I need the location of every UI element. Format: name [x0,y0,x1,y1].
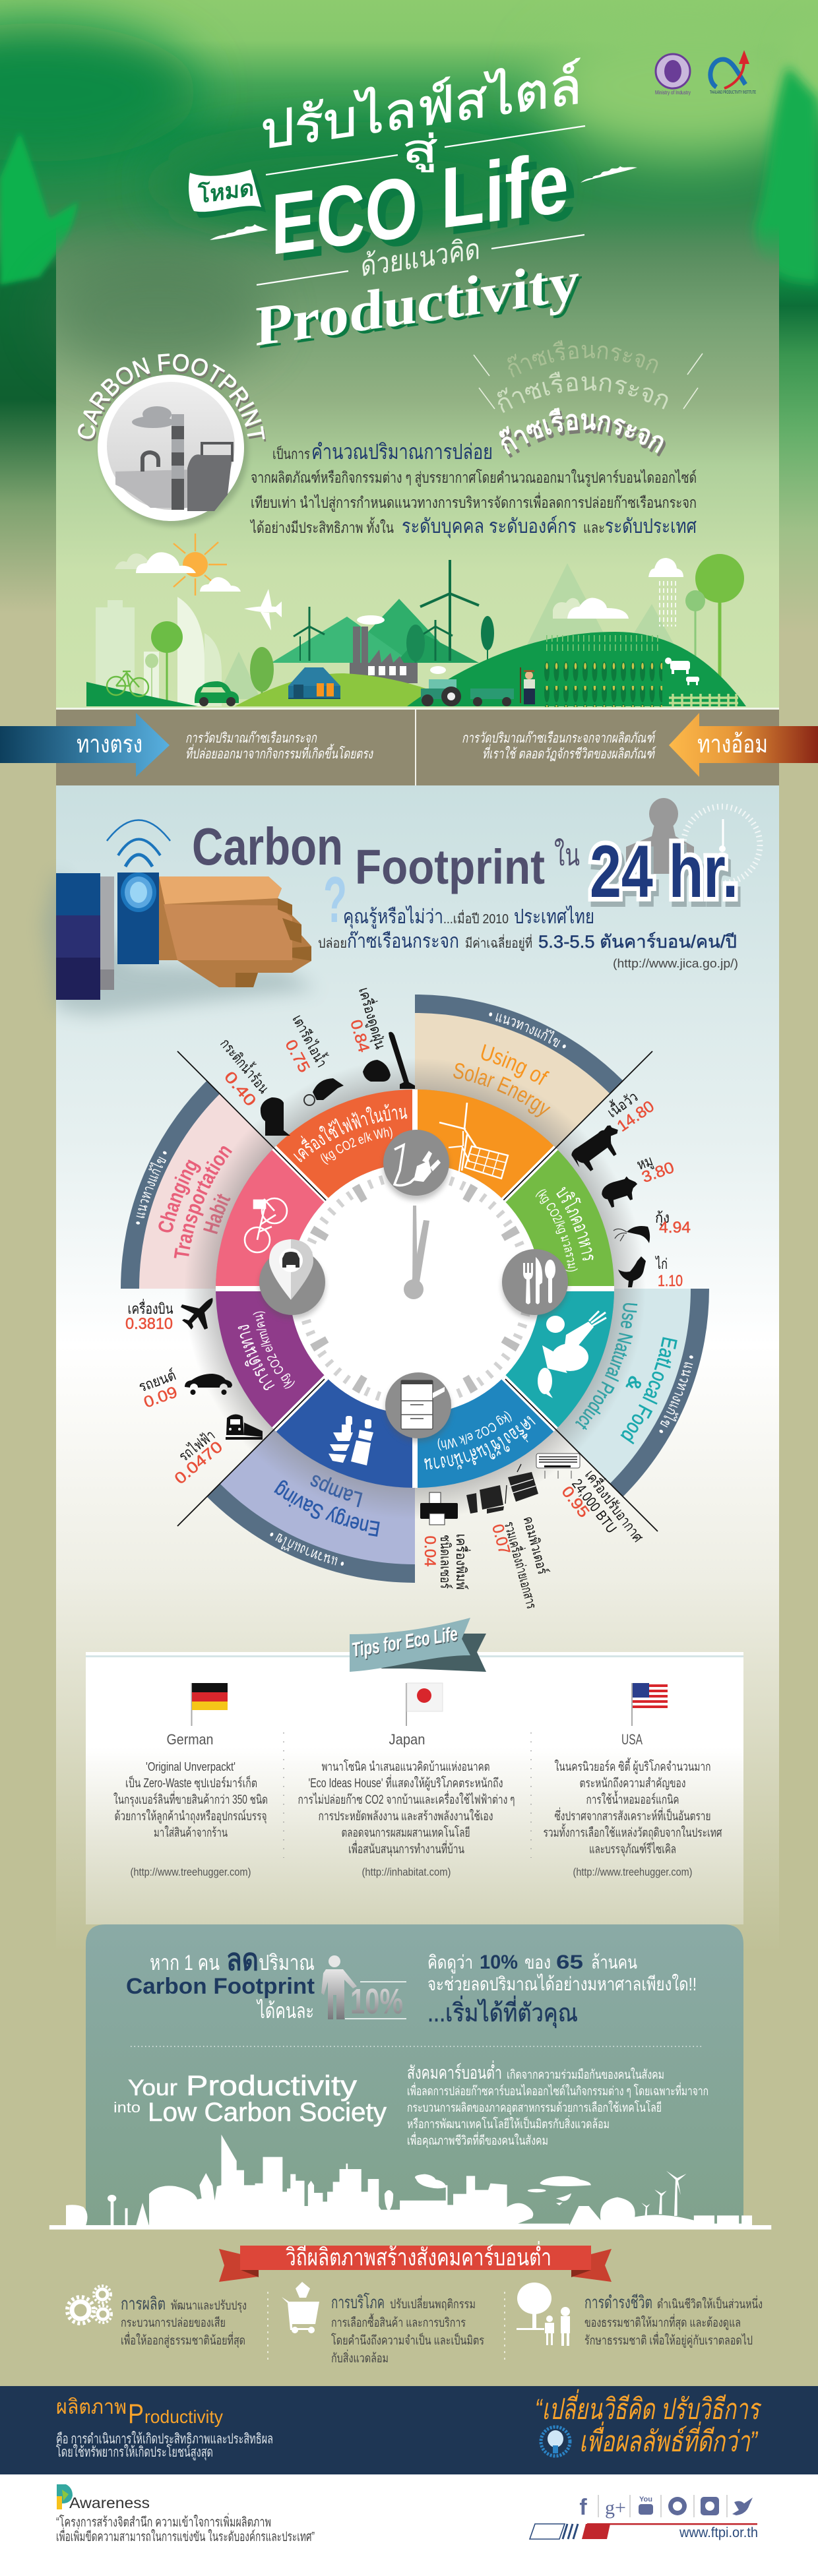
column: consumption: การบริโภค [331,2292,385,2312]
text block: project statement: เพื่อเพิ่มขีดความสามารถในการแข่งขัน ในระดับองค์กรและประเทศ” [56,2527,315,2544]
badge: filing cabinet [385,1372,451,1442]
text: indirect description: การวัดปริมาณก๊าซเรือนกระจกจากผลิตภัณฑ์ [462,730,656,746]
panel: carbon footprint intro [46,50,779,708]
title line: ปรับไลฟ์สไตล์: ปรับไลฟ์สไตล์ [261,56,582,160]
text block: think about 65 million: คิดดูว่า [427,1952,473,1974]
panel: ten percent and low carbon society [49,1924,771,2230]
icon: thermos [261,1097,290,1136]
column: Japan: 'Eco Ideas House' ที่แสดงให้ผู้บริโภคตระหนักถึง [309,1774,503,1791]
arrow: direct [0,713,170,777]
column: production: พัฒนาและปรับปรุง [171,2299,247,2314]
column: Germany: 'Original Unverpackt' [146,1760,236,1773]
items: electric appliances: กระติกน้ำร้อน [217,1034,274,1097]
sector: solar energy solution: Using of [482,1044,550,1086]
arrow: indirect: ทางอ้อม [697,731,768,758]
column: living [517,2283,763,2348]
items: office: ชนิดเลเซอร์ [437,1535,453,1589]
sector: local food solution: & [625,1376,641,1389]
column: production: เพื่อให้ออกสู่ธรรมชาติน้อยที่สุด [121,2331,245,2348]
logo: Ministry of Industry seal [655,54,691,96]
heading: Carbon Footprint in 24 hr [192,817,741,918]
items: food: 4.94 [659,1219,691,1237]
icon: person with 10 percent [321,1955,406,2021]
column: Germany: เป็น Zero-Waste ซุปเปอร์มาร์เก็ต [125,1775,257,1791]
sector: local food solution: Use Natural Product [575,1303,637,1430]
text block: think about 65 million: 65 [556,1951,583,1973]
column: Germany: ในกรุงเบอร์ลินที่ขายสินค้ากว่า 350 ชนิด [113,1791,268,1808]
column: Japan: การไม่ปล่อยก๊าซ CO2 จากบ้านและเครื่องใช้ไฟฟ้าต่าง ๆ [298,1791,515,1807]
panel: carbon footprint in 24 hours [0,785,818,2576]
sector: food consumption: (kg CO2/kg มวลรวม) [536,1189,578,1272]
heading: your productivity into low carbon society: Productivity [186,2070,358,2102]
column: Japan: เพื่อสนับสนุนการทำงานที่บ้าน [348,1840,464,1857]
text block: productivity definition: คือ การดำเนินการให้เกิดประสิทธิภาพและประสิทธิผล [56,2431,273,2447]
icon: wheat left [210,224,268,240]
items: office: เครื่องปรับอากาศ [582,1465,648,1545]
clock hands [404,1206,429,1299]
sector: travel: การเดินทาง [232,1322,279,1395]
title line: ECO Life: Life [449,140,577,253]
panel: productivity ways for low carbon society [67,2241,763,2366]
items: travel: 0.0470 [172,1438,226,1488]
icon: wifi arcs [107,820,170,867]
far mountains [216,563,686,699]
text block: reduce 10 percent: หาก 1 คน [150,1951,220,1975]
icon: plane [181,1298,212,1330]
text block: definition paragraph: คำนวณปริมาณการปล่อย [311,440,493,464]
column: USA [544,1683,722,1878]
icon: car [195,681,239,706]
text block: definition paragraph: ได้อย่างมีประสิทธิภาพ ทั้งใน [249,517,394,536]
logo: Thailand Productivity Institute [710,50,756,95]
text block: did you know: คุณรู้หรือไม่ว่า [343,905,443,929]
column: USA: ในนครนิวยอร์ค ซิตี้ ผู้บริโภคจำนวนมาก [554,1758,711,1774]
illustration: hand thumbs down with wrist band [56,873,311,1000]
icon: printer [420,1492,458,1525]
text block: low carbon society [407,2060,708,2149]
column: living: ดำเนินชีวิตให้เป็นส่วนหนึ่ง [657,2295,763,2312]
items: office: 24,000 BTU [569,1476,620,1536]
logo: Ministry of Industry seal: Ministry of Industry [655,90,691,96]
sector: electric appliances [274,1089,415,1200]
title line: ECO Life: ECO [279,164,425,280]
text block: project statement [56,2513,315,2544]
column: living: การดำรงชีวิต [584,2292,652,2312]
text block: definition paragraph: เป็นการ [272,445,310,462]
panel: productivity definition navy band [0,2386,818,2474]
sector: local food solution: EatLocal Food [620,1337,677,1444]
text block: low carbon society: เกิดจากความร่วมมือกันของคนในสังคม [507,2068,664,2082]
logo: Thailand Productivity Institute: THAILAND PRODUCTIVITY INSTITUTE [710,90,756,95]
title line: ECO Life: Life [441,134,569,247]
column: consumption: โดยคำนึงถึงความจำเป็น และเป็นมิตร [331,2332,484,2348]
sector: office equipment: เครื่องใช้ในสำนักงาน [424,1411,540,1476]
icon: fence [669,694,738,706]
icon: bicycle with basket [245,1198,287,1252]
column: USA: และบรรจุภัณฑ์รีไซเคิล [589,1842,676,1857]
items: travel: เครื่องบิน [128,1299,173,1317]
text: direct description [185,731,373,762]
text: direct description: ที่ปล่อยออกมาจากกิจกรรมที่เกิดขึ้นโดยตรง [185,743,373,762]
badge: plug [383,1130,449,1200]
sector: changing transportation solution: • แนวทางแก้ไข • [136,1151,167,1225]
items: office: 0.07 [488,1522,513,1556]
heading: productivity: ผลิตภาพ [56,2395,127,2418]
items: food: หมู [635,1152,655,1174]
text block: low carbon society: หรือการพัฒนาเทคโนโลยีให้เป็นมิตรกับสิ่งแวดล้อม [407,2115,610,2131]
title line: Productivity: Productivity [255,249,579,358]
icon: car silhouette [185,1374,232,1395]
column: Japan [298,1683,515,1878]
text block: reduce 10 percent: ปริมาณ [259,1951,315,1975]
panel: footer [0,2474,818,2576]
sector: changing transportation solution [121,1081,274,1289]
sector: food consumption [503,1148,614,1289]
text block: low carbon society: เพื่อคุณภาพชีวิตที่ดีของคนในสังคม [407,2131,548,2149]
text block: curved greenhouse gas words: ก๊าซเรือนกระจก [497,371,668,413]
text block: think about 65 million [427,1951,697,2028]
title line: Productivity: Productivity [259,252,582,361]
title [189,56,637,361]
items: office: เครื่องพิมพ์ [453,1534,471,1589]
icon: shrimp [614,1226,650,1243]
icon: wind and solar [439,1103,508,1179]
title line: ECO Life: ECO [271,158,418,273]
ring dividers and spokes [177,1051,658,1531]
sector: energy saving lamps solution: Energy Saving [274,1480,380,1537]
text block: think about 65 million: ล้านคน [591,1952,637,1973]
items: electric appliances: เครื่องดูดฝุ่น [355,985,391,1051]
text block: curved greenhouse gas words: ก๊าซเรือนกระจก [501,410,666,458]
text block: low carbon society: สังคมคาร์บอนต่ำ [407,2060,502,2083]
heading: Carbon Footprint in 24 hr: ใน [554,838,580,872]
sector: local food solution: • แนวทางแก้ไข • [659,1355,693,1433]
sector: local food inner [503,1289,614,1430]
icon: pig [599,1174,642,1210]
icon: Japan flag [406,1683,443,1726]
banner: tips ribbon: Tips for Eco Life [350,1623,459,1661]
column: Germany [113,1683,268,1878]
text: direct description: การวัดปริมาณก๊าซเรือนกระจก [185,731,317,746]
column: USA: USA [621,1731,643,1748]
title line: สู่: สู่ [402,128,438,172]
text block: reduce 10 percent: ลด [226,1942,259,1977]
text block: did you know: ปล่อย [318,936,347,951]
text block: did you know: ...เมื่อปี 2010 [443,909,509,927]
text block: reduce 10 percent: ได้คนละ [256,1999,314,2023]
icon: vegetables [538,1311,606,1398]
heading: Carbon Footprint in 24 hr: Carbon [192,817,343,876]
items: food: 1.10 [658,1272,683,1290]
text block: project statement: “โครงการสร้างจิตสำนึก ความเข้าใจการเพิ่มผลิตภาพ [56,2513,271,2530]
text block: definition paragraph: เทียบเท่า นำไปสู่การกำหนดแนวทางการบริหารจัดการเพื่อลดการปล่อยก๊าซเรือนกระจก [251,492,697,512]
icon: wheat right [581,166,637,183]
items: office: 0.95 [558,1483,592,1521]
sector: energy saving lamps solution: • แนวทางแก้ไข • [270,1533,344,1566]
icon: tractor and trailer [421,666,514,706]
items: office: รวมเครื่องถ่ายเอกสาร [501,1519,542,1610]
heading: Carbon Footprint in 24 hr: Footprint [355,840,545,894]
banner: โหมด: โหมด [197,174,254,208]
items: travel: รถไฟฟ้า [175,1426,218,1465]
factory [350,615,418,683]
right clouds and rain [553,558,683,627]
items: travel: 0.09 [141,1383,179,1412]
column: Japan: พานาโซนิค นำเสนอแนวคิดบ้านแห่งอนาคต [322,1759,489,1774]
heading: your productivity into low carbon society: Low Carbon Society [148,2098,387,2127]
badge: car pin [259,1239,325,1319]
arrow: indirect [669,713,818,777]
logo: P Awareness [57,2484,150,2511]
text block: did you know: 5.3-5.5 ตันคาร์บอน/คน/ปี [538,931,737,952]
text block: did you know: (http://www.jica.go.jp/) [613,957,738,970]
clock face [290,1163,540,1414]
quote: เพื่อผลลัพธ์ที่ดีกว่า” [579,2421,759,2458]
items: electric appliances: เตารีดไอน้ำ [289,1011,332,1070]
icon: gears [67,2286,111,2323]
icon: train [226,1414,263,1440]
icon: person and clock [626,798,760,883]
text block: definition paragraph: จากผลิตภัณฑ์หรือกิจกรรมต่าง ๆ สู่บรรยากาศโดยคำนวณออกมาในรูปคาร์บอนไดออกไซด์ [251,469,697,487]
arrow: direct: ทางตรง [77,731,142,758]
heading: your productivity into low carbon society: Your [128,2075,177,2101]
icon: family and tree [517,2283,570,2346]
icon: wind turbines [294,560,479,661]
text block: did you know: ก๊าซเรือนกระจก [347,931,459,952]
icon: question mark: ? [323,863,347,936]
column: consumption: การเลือกซื้อสินค้า และการบริการ [331,2314,466,2330]
hills [86,632,746,707]
heading: Carbon Footprint in 24 hr: 24 hr. [590,830,738,913]
items: office: 0.04 [421,1535,439,1567]
text block: curved greenhouse gas words: ก๊าซเรือนกระจก [499,408,664,454]
badge: carbon footprint factory [98,375,248,526]
sector: electric appliances: (kg CO2 e/k Wh) [321,1126,393,1165]
text block: productivity definition [56,2431,273,2461]
icon: iron [304,1078,344,1105]
items: food: ไก่ [655,1256,668,1272]
illustration: green landscape [86,534,746,707]
sector: energy saving lamps solution [207,1430,415,1583]
logo: P Awareness: Awareness [69,2494,150,2511]
text block: did you know [318,905,738,970]
social media icons: g+ [605,2497,626,2519]
column: Japan: การประหยัดพลังงาน และสร้างพลังงานใช้เอง [318,1809,493,1824]
items: food [569,1087,691,1290]
items: electric appliances: 0.75 [281,1037,313,1076]
illustration: white city skyline [49,2135,771,2230]
sector: transport habit inner [216,1148,327,1289]
social media icons: f [579,2495,587,2520]
items: office [420,1454,648,1610]
column: USA: รวมทั้งการเลือกใช้แหล่งวัตถุดิบจากในประเทศ [544,1824,722,1841]
items: electric appliances [217,985,415,1136]
heading: curved CARBON FOOTPRINT: CARBON FOOTPRINT [78,353,265,439]
items: travel: 0.3810 [125,1315,173,1333]
icon: farmer [520,667,535,704]
icon: USA flag [631,1683,668,1726]
icon: person with 10 percent: 10% [350,1982,403,2021]
sector: solar energy solution: Solar Energy [453,1063,550,1117]
icon: cow [569,1122,629,1175]
sector: changing transportation solution: Changing [158,1159,201,1233]
text block: definition paragraph: ระดับประเทศ [605,516,697,537]
heading: productivity: P [128,2398,144,2429]
items: travel: รถยนต์ [137,1366,178,1395]
icon: cows [665,658,699,685]
text block: did you know: ประเทศไทย [514,905,594,928]
sector: travel: (kg CO2 e/km/คน) [251,1310,297,1392]
sector: electric appliances: เครื่องใช้ไฟฟ้าในบ้าน [293,1104,408,1162]
text block: think about 65 million: จะช่วยลดปริมาณได้อย่างมหาศาลเพียงใด!! [427,1973,697,1994]
social media icons [579,2495,753,2520]
text block: definition paragraph [249,440,697,539]
sector: office equipment [415,1377,556,1488]
text block: curved greenhouse gas words: ก๊าซเรือนกระจก [507,340,658,377]
sector: energy saving lamps solution: Lamps [310,1475,363,1508]
column: production: การผลิต [121,2294,166,2314]
icon: house [288,667,340,699]
text block: reduce 10 percent: Carbon Footprint [126,1974,315,1999]
sector: lamps inner [274,1377,415,1488]
icon: air conditioner [536,1454,580,1479]
column: USA: ซึ่งปราศจากสารสังเคราะห์ที่เป็นอันตราย [554,1807,711,1824]
items: food: เนื้อวัว [603,1087,641,1120]
social media icons: You [639,2496,652,2503]
banner: red ribbon title [219,2241,612,2282]
column: USA: (http://www.treehugger.com) [573,1866,693,1878]
text block: definition paragraph: ระดับบุคคล ระดับองค์กร [402,515,577,539]
text: indirect description: ที่เราใช้ ตลอดวัฏจักรชีวิตของผลิตภัณฑ์ [482,744,656,762]
column: USA: การใช้น้ำหอมออร์แกนิค [586,1791,679,1807]
column: Japan: (http://inhabitat.com) [362,1866,451,1878]
heading: your productivity into low carbon society: into [113,2099,141,2116]
text block: think about 65 million: 10% [480,1951,518,1973]
sector: local food solution [556,1289,709,1496]
logo: FTPI and website [530,2523,758,2540]
logo: FTPI and website: www.ftpi.or.th [679,2525,758,2540]
banner: red ribbon title: วิถีผลิตภาพสร้างสังคมคาร์บอนต่ำ [286,2241,551,2271]
items: electric appliances: 0.84 [346,1018,373,1055]
icon: copier [505,1464,538,1504]
badge: cutlery [502,1249,568,1319]
icon: sun and clouds [115,534,241,596]
panel: tips for eco life [86,1618,743,1924]
icon: vacuum [363,1032,415,1089]
column: consumption: กับสิ่งแวดล้อม [331,2349,389,2366]
column: living: ของธรรมชาติให้มากที่สุด และต้องดูแล [584,2314,741,2331]
column: Germany: มาใส่สินค้าจากร้าน [154,1825,228,1840]
column: Germany: (http://www.treehugger.com) [131,1866,251,1878]
text block: low carbon society: กระบวนการผลิตของภาคอุตสาหกรรมด้วยการเลือกใช้เทคโนโลยี [407,2100,662,2116]
icon: chicken [618,1256,646,1287]
column: living: รักษาธรรมชาติ เพื่อให้อยู่คู่กับเราตลอดไป [584,2331,753,2348]
heading: Carbon Footprint in 24 hr: 24 hr. [592,836,741,918]
sector: solar inner [415,1089,556,1200]
city buildings [96,597,222,706]
banner: tips ribbon: Tips for Eco Life [351,1624,460,1663]
column: Japan: Japan [389,1731,425,1748]
heading: productivity [56,2395,223,2429]
sector: changing transportation solution: Habit [203,1194,231,1235]
heading: productivity: roductivity [144,2407,223,2427]
text block: definition paragraph: และ [583,519,605,536]
text block: low carbon society: เพื่อลดการปล่อยก๊าซคาร์บอนไดออกไซด์ในกิจกรรมต่าง ๆ โดยเฉพาะที่มาจาก [407,2082,708,2099]
column: consumption [282,2282,484,2366]
column: Japan: ตลอดจนการผสมผสานเทคโนโลยี [342,1825,470,1840]
title line: ด้วยแนวคิด: ด้วยแนวคิด [361,233,480,283]
text block: productivity definition: โดยใช้ทรัพยากรให้เกิดประโยชน์สูงสุด [56,2444,213,2461]
icon: bicycle [107,671,148,696]
column: consumption: ปรับเปลี่ยนพฤติกรรม [390,2295,476,2312]
column: production [67,2286,247,2348]
quote [535,2389,762,2458]
column: production: กระบวนการปล่อยของเสีย [121,2315,226,2330]
column: Germany: ด้วยการให้ลูกค้านำถุงหรืออุปกรณ์บรรจุ [115,1809,267,1824]
ring shadow [184,1058,646,1519]
illustration: arm shadow [43,871,317,1016]
chart: 24-hour carbon clock [121,985,709,1610]
icon: German flag [191,1683,228,1726]
items: food: กุ้ง [655,1210,670,1227]
text block: think about 65 million: ...เริ่มได้ที่ตัวคุณ [427,1996,578,2028]
items: travel [125,1298,263,1488]
title line: ECO Life [271,134,577,280]
icon: energy saving lamps [329,1416,373,1465]
text block: reduce 10 percent [126,1942,315,2023]
sector: travel [216,1289,327,1430]
icon: light bulb [541,2427,570,2456]
column: Germany: German [166,1731,214,1748]
sector: food consumption: บริโภคอาหาร [556,1187,594,1261]
heading: Carbon Footprint in 24 hr: 24 hr. [590,830,738,913]
trees behind hill [145,554,744,706]
sector: solar energy solution [415,995,623,1148]
icon: computer [466,1485,504,1514]
sector: changing transportation solution: Transportation [174,1146,232,1258]
banner: โหมด [189,169,266,218]
items: electric appliances: 0.40 [220,1068,259,1110]
sector: solar energy solution: • แนวทางแก้ไข • [489,1012,566,1049]
heading: curved CARBON FOOTPRINT: CARBON FOOTPRINT [80,356,267,442]
items: office: คอมพิวเตอร์ [520,1515,551,1576]
text block: curved greenhouse gas words [474,336,703,463]
icon: shopping cart with recycling [282,2282,319,2333]
heading: your productivity into low carbon society [113,2070,387,2127]
icon: airplane [244,589,282,630]
text: indirect description [462,730,656,762]
text block: think about 65 million: ของ [524,1952,551,1973]
text block: did you know: มีค่าเฉลี่ยอยู่ที่ [465,934,532,952]
items: food: 14.80 [614,1097,658,1136]
column: USA: ตระหนักถึงความสำคัญของ [579,1777,686,1791]
sector: office equipment: (kg CO2 e/k Wh) [436,1409,515,1452]
panel: direct and indirect footprint [0,708,818,786]
items: food: 3.80 [639,1159,677,1186]
